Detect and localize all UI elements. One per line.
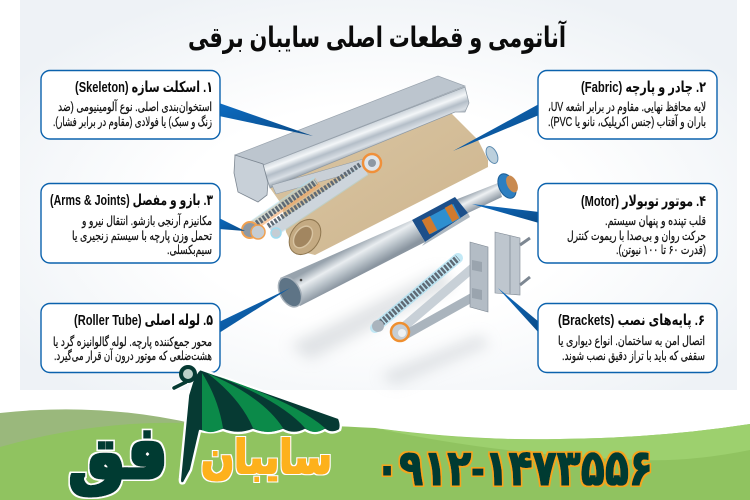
panel: skeleton: زنگ و سبک) یا فولادی (مقاوم در برابر فشار). bbox=[53, 114, 212, 130]
logo bbox=[68, 367, 341, 496]
panel: brackets: ۶. پایه‌های نصب (Brackets) bbox=[558, 312, 705, 330]
panel: roller tube bbox=[41, 304, 220, 372]
panel: background bbox=[20, 0, 737, 390]
panel: arms and joints bbox=[41, 184, 220, 263]
logo name: afogh: افق bbox=[68, 411, 190, 496]
illustration: awning parts bbox=[234, 76, 530, 385]
motor bbox=[412, 171, 520, 246]
panel: brackets: اتصال امن به ساختمان. انواع دیواری یا bbox=[558, 334, 705, 349]
pointer: brackets bbox=[498, 288, 539, 333]
panel: fabric: ۲. چادر و پارچه (Fabric) bbox=[581, 79, 706, 97]
panel: skeleton: ۱. اسکلت سازه (Skeleton) bbox=[75, 79, 213, 96]
panel: motor bbox=[538, 184, 717, 263]
panel: brackets bbox=[538, 304, 717, 372]
footer: green hills bbox=[0, 409, 750, 500]
brackets and lower arms bbox=[372, 232, 530, 341]
panel: fabric bbox=[538, 70, 717, 139]
pointer: skeleton bbox=[219, 103, 313, 136]
pointer: motor bbox=[472, 204, 539, 223]
logo name: sayeban: سایبان bbox=[201, 431, 332, 483]
shadows bbox=[290, 270, 490, 385]
roller tube bbox=[274, 220, 425, 311]
title: آناتومی و قطعات اصلی سایبان برقی bbox=[188, 20, 567, 54]
panel: motor: ۴. موتور توبولار (Motor) bbox=[581, 193, 706, 210]
panel: arms and joints: ۳. بازو و مفصل (Arms & Joints) bbox=[50, 192, 213, 209]
panel: arms and joints: مکانیزم آرنجی بازشو. انتقال نیرو و bbox=[81, 213, 212, 229]
arms and joints bbox=[242, 154, 381, 239]
panel: skeleton: استخوان‌بندی اصلی. نوع آلومینیومی (ضد bbox=[58, 99, 212, 115]
pointer: roller tube bbox=[219, 288, 290, 333]
panel: roller tube: هشت‌ضلعی که موتور درون آن قرار می‌گیرد. bbox=[54, 348, 212, 364]
logo awning bbox=[174, 367, 341, 483]
panel: arms and joints: سیم‌بکسلی. bbox=[167, 243, 212, 258]
pointer: fabric bbox=[453, 104, 539, 151]
panel: motor: (قدرت ۶۰ تا ۱۰۰ نیوتن). bbox=[616, 243, 706, 258]
panel: roller tube: محور جمع‌کننده پارچه. لوله گالوانیزه گرد یا bbox=[53, 334, 212, 350]
panel: skeleton bbox=[41, 70, 220, 139]
panel: motor: قلب تپنده و پنهان سیستم. bbox=[605, 214, 706, 229]
panel: arms and joints: تحمل وزن پارچه با سیستم زنجیری یا bbox=[72, 229, 212, 244]
cassette bbox=[234, 76, 469, 202]
phone number: ۰۹۱۲-۱۴۷۳۵۵۶ bbox=[375, 440, 653, 496]
panel: roller tube: ۵. لوله اصلی (Roller Tube) bbox=[74, 312, 213, 329]
fabric bbox=[270, 113, 500, 261]
pointer: arms bbox=[219, 218, 245, 231]
